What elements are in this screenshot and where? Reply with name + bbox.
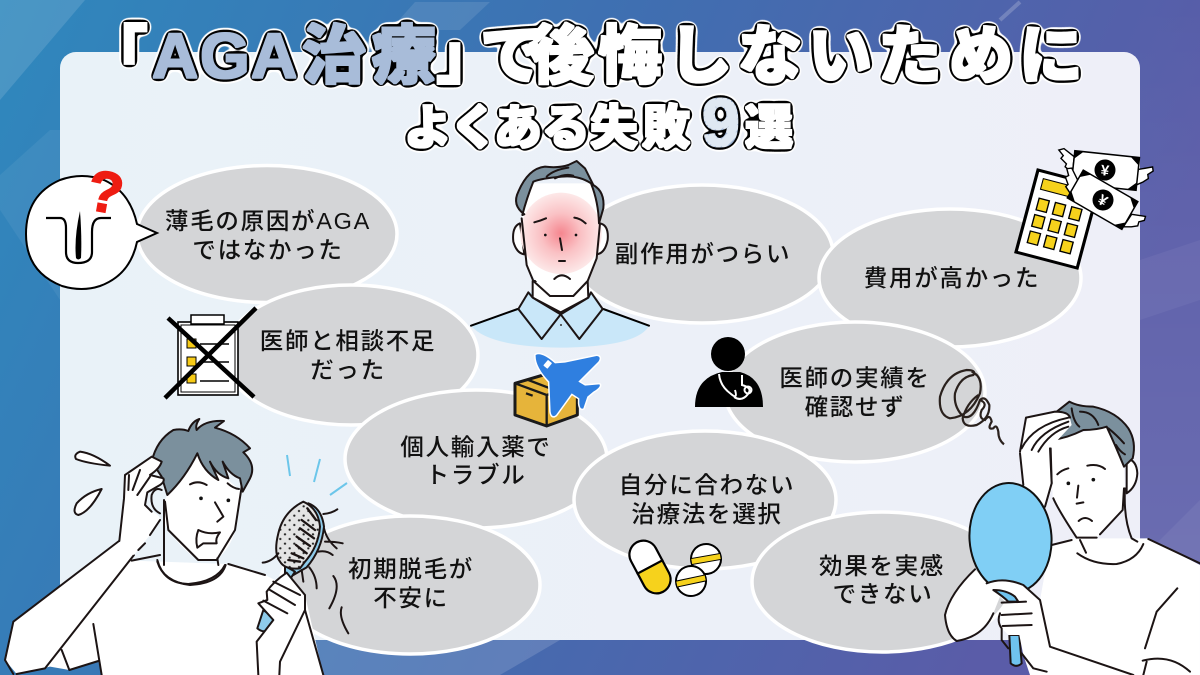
- bubble: no effect: できない: [833, 581, 933, 607]
- bubble: no effect: 効果を実感: [819, 552, 945, 579]
- mirror: [966, 480, 1055, 596]
- hair: [152, 419, 252, 495]
- icon: hair follicle speech bubble: [26, 157, 157, 289]
- bubble: lack of consultation: [224, 285, 478, 425]
- bubble: side effects: [571, 185, 833, 323]
- hair: [1052, 402, 1134, 467]
- facial features: [534, 218, 586, 279]
- box: [515, 375, 577, 426]
- facial features: [190, 482, 239, 522]
- icon: flying money: [1054, 148, 1155, 237]
- icon: hair follicle speech bubble: ?: [82, 157, 129, 228]
- torso: [1023, 538, 1200, 675]
- bubble: doctor's record: [725, 322, 985, 462]
- face: [522, 183, 600, 296]
- torso and arm: [5, 541, 323, 675]
- title: [84, 20, 1083, 161]
- bubble: personal import: 個人輸入薬で: [400, 434, 552, 460]
- hairbrush: [263, 502, 348, 633]
- sub heading: 9: [702, 85, 740, 161]
- icon: crossed-out clipboard: [165, 308, 256, 398]
- bubble: cause not AGA: ではなかった: [192, 237, 344, 263]
- bubble: side effects: 副作用がつらい: [615, 241, 791, 267]
- hand holding brush: [256, 573, 323, 675]
- hand on head: [1020, 412, 1072, 507]
- illustration: man looking in mirror: [945, 402, 1200, 675]
- icon: capsule and tablets: [624, 536, 723, 599]
- bubble: cause not AGA: [137, 166, 397, 302]
- bubble: cause not AGA: 薄毛の原因がAGA: [165, 208, 371, 234]
- icon: calculator: [1016, 170, 1099, 268]
- icon: airplane and cardboard box: [515, 354, 600, 426]
- ears: [513, 223, 608, 254]
- sub heading: よくある失敗: [404, 102, 690, 155]
- icon: tangled hair doodle: [940, 370, 1004, 444]
- bubble: lack of consultation: 医師と相談不足: [260, 328, 436, 354]
- bubble: personal import: [345, 390, 607, 528]
- bubble: high cost: [819, 209, 1081, 347]
- hand: [119, 457, 164, 555]
- plane: [536, 354, 600, 416]
- hair: [516, 161, 604, 223]
- bubble: doctor's record: 医師の実績を: [779, 365, 931, 391]
- bubble: high cost: 費用が高かった: [864, 265, 1040, 291]
- bubble: doctor's record: 確認せず: [805, 394, 905, 420]
- bubble: initial shedding: 初期脱毛が: [348, 556, 474, 582]
- bubble: unsuitable treatment: [574, 431, 836, 569]
- sub heading: 選: [745, 102, 793, 155]
- mirror arm: [945, 569, 1000, 641]
- bubble: personal import: トラブル: [426, 461, 526, 488]
- bubble: unsuitable treatment: 自分に合わない: [619, 472, 795, 498]
- main heading: 「AGA治療」で後悔しないために: [84, 20, 1083, 92]
- bubble: initial shedding: [280, 516, 540, 654]
- bubble: initial shedding: 不安に: [373, 585, 449, 611]
- icon: doctor silhouette: [695, 337, 763, 407]
- neck: [533, 281, 588, 312]
- facial features: [1057, 465, 1105, 521]
- hand on mirror handle: [987, 580, 1055, 675]
- icon: flying money: ¥: [1095, 191, 1111, 211]
- sweat drops: [75, 452, 110, 515]
- bubble: lack of consultation: だった: [310, 357, 386, 383]
- bubble: no effect: [752, 512, 1012, 652]
- head, hair and raised hand: [1020, 402, 1200, 563]
- illustration: worried man with hairbrush: [5, 419, 348, 675]
- white panel: [60, 52, 1140, 640]
- bubble: unsuitable treatment: 治療法を選択: [631, 501, 783, 527]
- surprise ticks: [287, 455, 347, 495]
- icon: center man with flushed face: [471, 161, 649, 348]
- icon: flying money: ¥: [1100, 162, 1111, 180]
- collar: [518, 292, 561, 339]
- head, hair and raised hand: [75, 419, 252, 585]
- shirt: [471, 292, 649, 348]
